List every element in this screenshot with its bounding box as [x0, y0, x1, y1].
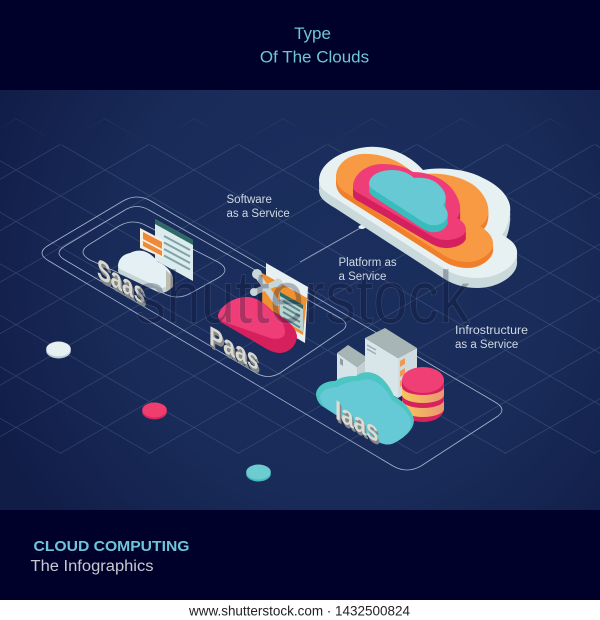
iso text: Saas: Saas	[97, 252, 145, 310]
iso text: Paas: Paas	[210, 322, 259, 379]
label: platform as a service	[338, 257, 397, 283]
icon: white cloud	[118, 251, 173, 293]
disc: red	[142, 402, 167, 420]
label: software as a service: Software	[226, 194, 272, 206]
icon: database cylinder	[402, 367, 444, 422]
stock image url: www.shutterstock.com · 1432500824	[188, 604, 410, 618]
icon: large server	[365, 328, 417, 398]
contour: IaaS zone	[42, 197, 502, 470]
layer: orange cloud	[336, 154, 493, 268]
disc: white	[46, 342, 71, 358]
iso text: Saas: Saas	[99, 256, 147, 314]
contour: SaaS zone	[83, 222, 225, 297]
label: software as a service: as a Service	[226, 208, 290, 220]
title: Of The Clouds	[260, 48, 369, 66]
icon: white back panel	[266, 263, 308, 343]
icon group: PaaS	[209, 263, 308, 381]
icon: small server	[337, 345, 368, 395]
label: infrastructure as a service	[455, 325, 528, 351]
iso text: Iaas: Iaas	[336, 396, 379, 451]
footer: cloud computing heading: CLOUD COMPUTING	[34, 538, 190, 555]
title	[260, 24, 369, 66]
label: platform as a service: a Service	[338, 271, 386, 283]
disc: teal	[246, 464, 271, 482]
icon: red cloud	[218, 297, 297, 353]
layer: pink cloud	[353, 164, 466, 248]
icon: document panel	[155, 219, 193, 281]
icon group: SaaS	[97, 219, 193, 314]
label: infrastructure as a service: as a Service	[455, 339, 518, 351]
icon: wrench and screwdriver	[250, 269, 282, 303]
panel: main dark blue stage	[0, 90, 600, 510]
label: infrastructure as a service: Infrostructure	[455, 325, 528, 337]
watermark: shutterstock	[135, 256, 471, 339]
main layered cloud	[319, 147, 517, 288]
stock image footer strip	[0, 600, 600, 620]
connector: main cloud to platform label	[300, 225, 366, 262]
contour: PaaS zone	[59, 206, 346, 376]
icon: small orange card	[140, 228, 163, 258]
icon group: IaaS	[316, 328, 444, 452]
label: software as a service	[226, 194, 290, 220]
iso text: Saas: Saas	[98, 254, 146, 312]
icon: teal cloud	[316, 372, 414, 444]
iso text: Iaas: Iaas	[337, 398, 380, 452]
iso text: Iaas: Iaas	[335, 394, 379, 449]
layer: white base cloud	[319, 147, 517, 288]
label: platform as a service: Platform as	[338, 257, 397, 269]
icon: small document	[280, 292, 303, 332]
title: Type	[294, 24, 331, 43]
iso text: Paas: Paas	[211, 324, 260, 381]
footer: the infographics subheading: The Infographics	[30, 558, 154, 575]
icon: orange folder	[262, 273, 307, 335]
isometric grid	[0, 110, 600, 460]
layer: teal cloud	[369, 170, 448, 232]
iso text: Paas: Paas	[209, 320, 259, 377]
